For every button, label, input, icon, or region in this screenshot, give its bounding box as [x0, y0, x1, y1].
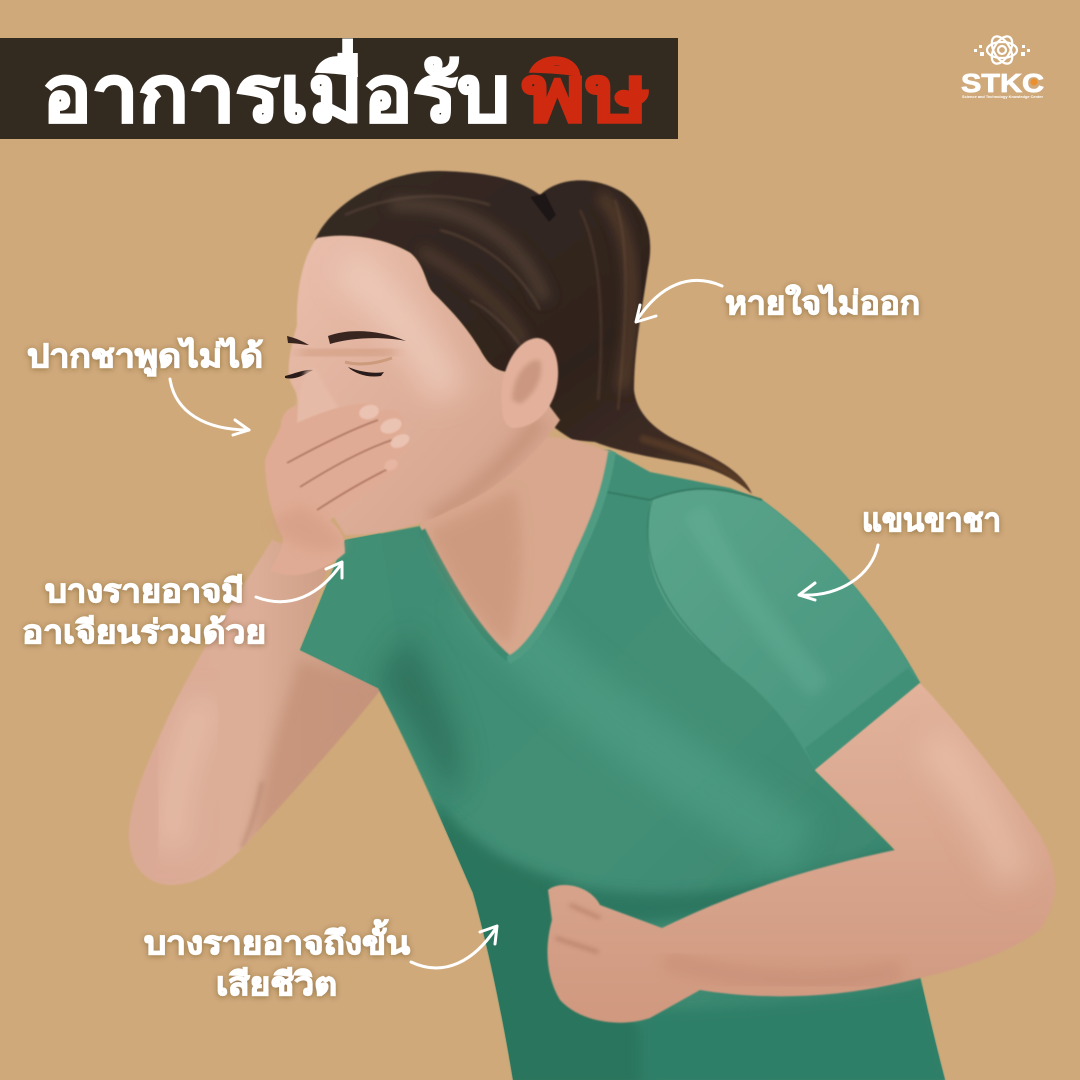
callout: breathing	[636, 280, 920, 322]
eyes and brows	[285, 331, 406, 379]
callout: numb mouth: ปากชาพูดไม่ได้	[27, 337, 263, 377]
callout: numb mouth	[27, 337, 263, 435]
arrow	[256, 562, 342, 602]
arrow	[170, 379, 249, 435]
hand over mouth	[265, 403, 412, 575]
logo tagline: Science and Technology Knowledge Center	[962, 94, 1043, 99]
far arm: forearm and elbow	[129, 540, 385, 885]
ponytail and hair	[315, 171, 752, 494]
title text: อาการเมื่อรับ	[42, 39, 510, 138]
sleeve	[607, 489, 920, 770]
logo: STKC	[961, 33, 1044, 99]
nose	[296, 368, 340, 423]
shirt body	[300, 450, 950, 1080]
logo wordmark: STKC	[961, 68, 1044, 98]
near arm with hand on stomach	[547, 683, 1055, 1023]
callout: breathing: หายใจไม่ออก	[725, 284, 920, 321]
head and face	[280, 236, 560, 535]
arrow	[636, 280, 722, 322]
neck	[420, 430, 612, 660]
arrow	[411, 926, 497, 968]
figure: woman with hand over mouth	[129, 171, 1055, 1080]
title bar	[0, 38, 678, 139]
logo atom mark	[987, 33, 1017, 67]
callout: vomiting: อาเจียนร่วมด้วย	[22, 614, 266, 650]
callout: death: บางรายอาจถึงขั้น	[144, 919, 410, 961]
callout: numb limbs	[799, 502, 1001, 600]
callout: death	[144, 919, 497, 1002]
callout: numb limbs: แขนขาชา	[862, 502, 1001, 538]
hair tie	[530, 193, 556, 222]
shoulder seam	[607, 489, 762, 500]
title highlight: พิษ	[522, 50, 650, 138]
ear	[501, 338, 558, 428]
callout: vomiting: บางรายอาจมี	[45, 573, 244, 609]
arrow	[799, 545, 878, 600]
callout: death: เสียชีวิต	[216, 966, 337, 1002]
callout: vomiting	[22, 562, 342, 650]
